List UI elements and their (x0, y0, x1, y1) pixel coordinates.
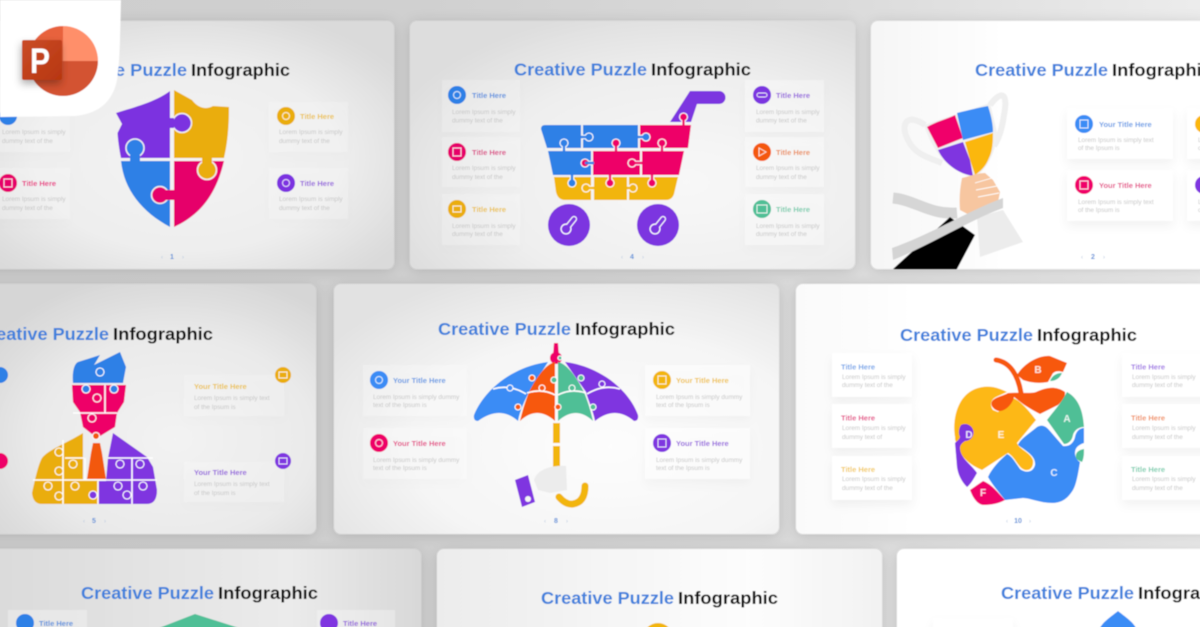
label: Your Title Here (676, 439, 729, 448)
label: Title Here (22, 179, 56, 188)
info card: right top (645, 365, 750, 416)
chart: puzzle apple (954, 356, 1084, 505)
page number: 5 (92, 518, 96, 525)
info card: left 3: dummy text of the (452, 231, 503, 238)
heading: bottom left: Infographic (218, 583, 318, 603)
heading: slide 8: Infographic (575, 319, 675, 339)
label: Title Here (776, 148, 810, 157)
chart: trophy and hand (892, 95, 1023, 269)
info card: left 1: Lorem Ipsum is simply (842, 374, 906, 381)
info card: left 2 (442, 137, 520, 187)
label: Your Title Here (676, 376, 729, 385)
info card: right 1: dummy text of the (756, 118, 807, 124)
info card: right 3: Lorem Ipsum is simply (1132, 476, 1196, 483)
icon (275, 453, 291, 469)
info card: right bottom (269, 168, 348, 219)
info card: left 1: dummy text of the (842, 382, 893, 389)
label: Your Title Here (194, 468, 247, 477)
info card: left 3: dummy text of the (842, 485, 893, 492)
chart: puzzle apple: E (998, 430, 1005, 441)
heading: slide 8: Creative Puzzle (438, 319, 571, 339)
panel: slide 1 shield (0, 21, 394, 269)
heading: bottom center (541, 588, 778, 608)
icon (448, 200, 466, 218)
page number: 4 (630, 254, 634, 261)
info card: right bottom: dummy text of the (279, 205, 330, 212)
icon (448, 86, 466, 104)
info card: right bottom: Lorem Ipsum is simply dummy (656, 457, 743, 464)
info card: right bottom (184, 453, 291, 502)
info card: left top: dummy text of the (2, 138, 53, 145)
heading: bottom center: Creative Puzzle (541, 588, 674, 608)
chart: green roof (159, 614, 239, 627)
info card: right 2: Lorem Ipsum is simply (756, 165, 820, 172)
label: Your Title Here (1099, 120, 1152, 129)
page number (621, 254, 644, 261)
page number: 2 (1091, 254, 1095, 261)
icon (277, 107, 295, 125)
info card: right top (269, 102, 348, 152)
info card: col 1 bottom (1067, 170, 1173, 221)
icon (653, 371, 671, 389)
heading: slide 1: Creative Puzzle (53, 60, 187, 80)
heading: slide 4: Creative Puzzle (514, 60, 647, 80)
label: Your Title Here (393, 376, 446, 385)
info card: right top: Lorem Ipsum is simply text (194, 395, 270, 402)
info card: right 1: Lorem Ipsum is simply (1132, 374, 1196, 381)
chart: puzzle shield (116, 90, 229, 227)
label: Title Here (472, 91, 506, 100)
heading: slide 10: Infographic (1037, 325, 1137, 345)
chart: puzzle cart (541, 91, 725, 246)
info card: col 1 bottom: Lorem Ipsum is simply text (1078, 199, 1154, 206)
heading: slide 5: Infographic (113, 324, 213, 344)
label: Title Here (300, 112, 334, 121)
info card: right 3 (1122, 456, 1200, 500)
heading: bottom center: Infographic (678, 588, 778, 608)
info card: col 2 top (1187, 108, 1200, 159)
info card: right bottom: text of the Ipsum is (656, 465, 710, 472)
info card: left 1: dummy text of the (452, 118, 503, 124)
info card: left 2: dummy text of the (452, 174, 503, 181)
info card: right 2: Lorem Ipsum is simply (1132, 425, 1196, 432)
info card: right 3: Lorem Ipsum is simply (756, 223, 820, 230)
info card: left 1 (442, 80, 520, 132)
info card: col 1 top: of the Ipsum is (1078, 145, 1120, 152)
icon (277, 174, 295, 192)
panel: slide 10 apple (796, 284, 1200, 534)
chart: puzzle apple: D (965, 430, 973, 441)
panel: bottom slide left (0, 549, 421, 627)
panel: slide 2 trophy (871, 21, 1200, 269)
info card: right 3: dummy text of the (1132, 485, 1183, 492)
chart: puzzle person (32, 352, 157, 504)
info card: right 3: dummy text of the (756, 231, 807, 238)
info card: right bottom: Lorem Ipsum is simply (279, 196, 343, 203)
info card: col 1 top: Lorem Ipsum is simply text (1078, 137, 1154, 144)
panel: slide 4 shopping cart (410, 21, 855, 269)
info card: left 1: Lorem Ipsum is simply (452, 109, 516, 116)
heading: slide 2: Creative Puzzle (975, 60, 1108, 80)
icon (1075, 176, 1093, 194)
panel: bottom slide center (437, 549, 882, 627)
heading: slide 5 (0, 324, 213, 344)
info card: left top: Lorem Ipsum is simply dummy (373, 394, 460, 401)
heading: slide 10: Creative Puzzle (900, 325, 1033, 345)
label: Title Here (841, 414, 875, 422)
info card: right 1 (745, 80, 824, 132)
label: Title Here (841, 465, 875, 474)
icon: right wheel (637, 204, 679, 246)
PowerPoint badge tab (0, 0, 121, 117)
heading: slide 4 (514, 60, 751, 80)
info card: left 1 (832, 353, 912, 397)
label: Title Here (300, 179, 334, 188)
info card: right 1: dummy text of the (1132, 382, 1183, 389)
info card: col 1 bottom: of the Ipsum is (1078, 207, 1120, 214)
icon (753, 86, 771, 104)
page number: 8 (554, 518, 558, 525)
heading: bottom left (81, 583, 318, 603)
chart: blue drop (1099, 611, 1137, 627)
chart: puzzle apple: B (1034, 365, 1042, 376)
panel: slide 8 umbrella (334, 284, 779, 534)
page number (544, 518, 568, 525)
label: Title Here (776, 205, 810, 214)
info card: right 3 (745, 194, 824, 245)
info card: right top: text of the Ipsum is (656, 402, 710, 409)
info card: right top: Lorem Ipsum is simply dummy (656, 394, 743, 401)
chart: puzzle apple: C (1050, 468, 1058, 479)
icon: left wheel (548, 204, 590, 246)
page number (83, 518, 106, 525)
heading: slide 4: Infographic (651, 60, 751, 80)
heading: slide 1: Infographic (191, 60, 290, 80)
icon (448, 143, 466, 161)
icon (1075, 115, 1093, 133)
info card: left 3 (442, 194, 520, 245)
page number: 10 (1014, 518, 1022, 525)
heading: slide 1 (53, 60, 290, 80)
info card: left top (0, 102, 70, 152)
page number: ‹ (1081, 255, 1083, 261)
label: Title Here (1131, 414, 1165, 422)
chart: puzzle apple: A (1063, 414, 1071, 425)
info card: right 2 (745, 137, 824, 187)
page number: ‹ (83, 519, 85, 525)
page number: › (1103, 255, 1105, 261)
info card: right bottom: Lorem Ipsum is simply text (194, 481, 270, 488)
info card: left (8, 610, 87, 627)
info card: right top: Lorem Ipsum is simply (279, 129, 343, 136)
info card: left top (363, 365, 467, 416)
info card: left icons (0, 367, 8, 469)
info card: col 1 top (1067, 108, 1173, 159)
info card: right (317, 610, 395, 627)
page number: › (566, 519, 568, 525)
info card: left 2: Lorem Ipsum is simply (452, 165, 516, 172)
heading: bottom right: Creative Puzzle (1001, 583, 1134, 603)
icon (753, 200, 771, 218)
info card: right bottom: of the Ipsum is (194, 490, 236, 497)
info card: left 3: Lorem Ipsum is simply (452, 223, 516, 230)
info card: right bottom (645, 428, 750, 479)
icon (370, 371, 388, 389)
heading: bottom left: Creative Puzzle (81, 583, 214, 603)
panel: slide 5 businessman (0, 284, 316, 534)
label: Title Here (841, 362, 875, 372)
info card: left 2 (832, 404, 912, 448)
icon: PowerPoint logo: P (30, 42, 50, 81)
info card: right 2: dummy text of the (1132, 434, 1183, 441)
info card: right 1: Lorem Ipsum is simply (756, 109, 820, 116)
page number: › (182, 255, 184, 261)
label: Title Here (776, 91, 810, 100)
page number: ‹ (621, 255, 623, 261)
icon (370, 434, 388, 452)
page number (161, 254, 184, 261)
info card: left bottom (0, 168, 70, 219)
heading: slide 10 (900, 325, 1137, 345)
info card: left bottom: Lorem Ipsum is simply (2, 196, 66, 203)
icon (275, 367, 291, 383)
page number (1006, 518, 1031, 525)
page number: › (1029, 519, 1031, 525)
info card: left top: text of the Ipsum is (373, 402, 427, 409)
info card: right 2 (1122, 404, 1200, 448)
info card: left 3: Lorem Ipsum is simply (842, 476, 906, 483)
info card: right 2: dummy text of the (756, 174, 807, 181)
page number: 1 (170, 254, 174, 261)
info card: left 3 (832, 456, 912, 500)
info card: left bottom: text of the Ipsum is (373, 465, 427, 472)
label: Title Here (1131, 465, 1165, 474)
chart: puzzle apple: F (980, 488, 986, 499)
info card: right top: of the Ipsum is (194, 404, 236, 411)
chart: yellow top (643, 623, 673, 627)
page number: › (104, 519, 106, 525)
label: Title Here (1131, 362, 1165, 372)
info card: left bottom: dummy text of the (2, 205, 53, 212)
info card: right top: dummy text of the (279, 138, 330, 145)
heading: bottom right (1001, 583, 1200, 603)
info card: left top: Lorem Ipsum is simply (2, 129, 66, 136)
panel: bottom slide right (897, 549, 1200, 627)
info card: right 1 (1122, 353, 1200, 397)
info card: left 2: Lorem Ipsum is simply (842, 425, 906, 432)
label: Title Here (472, 148, 506, 157)
label: Your Title Here (194, 382, 247, 391)
page number (1081, 254, 1105, 261)
info card: left bottom (363, 428, 467, 479)
heading: slide 8 (438, 319, 675, 339)
page number: ‹ (161, 255, 163, 261)
info card: left bottom: Lorem Ipsum is simply dummy (373, 457, 460, 464)
info card (933, 618, 1013, 627)
page number: › (642, 255, 644, 261)
label: Your Title Here (1099, 181, 1152, 190)
icon (753, 143, 771, 161)
label: Title Here (472, 205, 506, 214)
chart: puzzle umbrella (474, 343, 638, 507)
icon (0, 174, 17, 192)
page number: ‹ (544, 519, 546, 525)
info card: col 2 bottom (1187, 170, 1200, 221)
label: Your Title Here (393, 439, 446, 448)
icon (653, 434, 671, 452)
info card: right top (184, 367, 291, 416)
page number: ‹ (1006, 519, 1008, 525)
info card: left 2: dummy text of (842, 434, 882, 441)
heading: slide 2 (975, 60, 1200, 80)
